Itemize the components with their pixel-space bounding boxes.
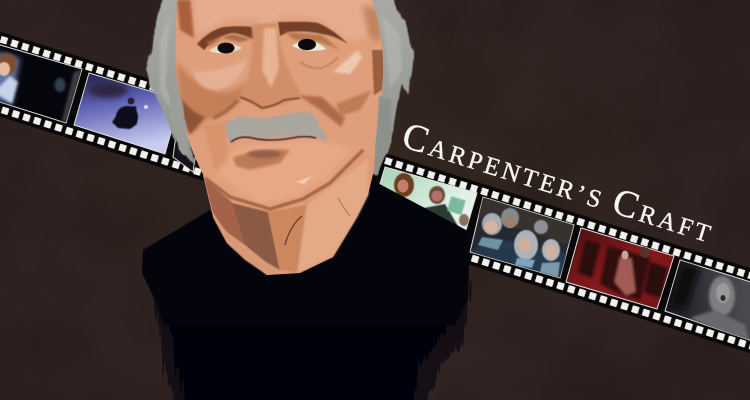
hair: back strands <box>146 0 414 176</box>
shirt: translucent lower brush <box>152 280 470 400</box>
frame: Village children <box>470 197 574 278</box>
shirt: shoulders and chest <box>142 180 470 325</box>
shirt <box>142 180 470 400</box>
shirt: solid lower brush <box>165 280 462 400</box>
face <box>176 0 386 210</box>
hair: front strands <box>166 72 391 174</box>
mouth line <box>231 136 316 142</box>
frame: dark sliver behind the hair <box>173 106 202 172</box>
chin and jaw <box>220 143 344 200</box>
eyes <box>209 39 326 53</box>
title: CARPENTER’S CRAFT <box>397 115 717 251</box>
frame: pale screaming woman <box>665 260 750 345</box>
neck <box>203 130 376 275</box>
right cheek and nasolabial <box>298 95 345 127</box>
portrait <box>142 0 470 400</box>
left cheek shadow <box>176 60 250 132</box>
frame: woman and masked figure <box>0 42 82 123</box>
mustache <box>225 112 329 144</box>
forehead and temple shading <box>177 0 194 38</box>
nose <box>240 22 300 110</box>
frame: red figures <box>566 228 674 309</box>
lower left cheek <box>204 121 228 170</box>
brows <box>197 26 255 50</box>
frame: figure in fog <box>74 73 180 154</box>
frame: They Live faces <box>379 166 478 230</box>
